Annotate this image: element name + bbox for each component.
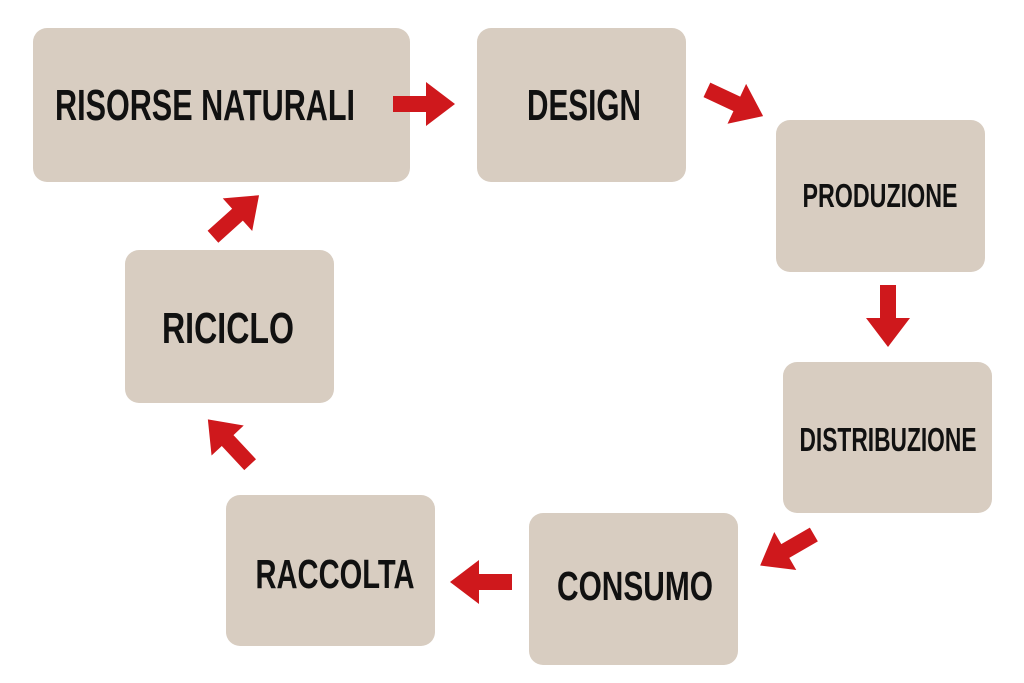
box: risorse naturali: RISORSE NATURALI <box>55 81 355 130</box>
box: consumo: CONSUMO <box>557 563 713 609</box>
box: design: DESIGN <box>527 81 641 130</box>
box: distribuzione <box>783 362 992 513</box>
arrow: riciclo to risorse <box>198 179 274 253</box>
arrow: raccolta to riciclo <box>192 404 266 480</box>
arrow: design to produzione <box>698 70 772 136</box>
box: consumo <box>529 513 738 665</box>
box: raccolta <box>226 495 435 646</box>
box: produzione: PRODUZIONE <box>802 177 958 214</box>
box: risorse naturali <box>33 28 410 182</box>
arrow: risorse to design <box>393 82 455 126</box>
box: riciclo: RICICLO <box>162 304 294 353</box>
arrow: produzione to distribuzione <box>866 285 910 347</box>
arrow: consumo to raccolta <box>450 560 512 604</box>
box: raccolta: RACCOLTA <box>256 551 414 597</box>
box: riciclo <box>125 250 334 403</box>
box: design <box>477 28 686 182</box>
arrow: distribuzione to consumo <box>749 515 825 585</box>
box: produzione <box>776 120 985 272</box>
